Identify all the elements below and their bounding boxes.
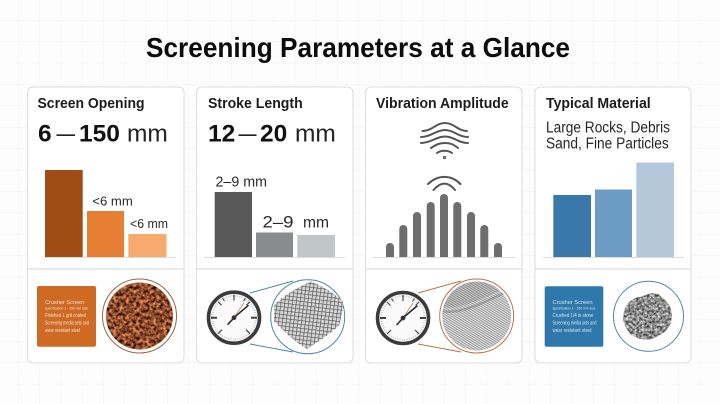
value: 12 to 20 mm: 12	[208, 120, 235, 148]
bar chart: typical material	[543, 162, 684, 258]
image: gray pellets	[614, 281, 684, 351]
bar chart: screen opening: <6 mm	[92, 193, 133, 208]
icon: zoom leader lines	[250, 281, 293, 352]
text: material list	[546, 120, 670, 152]
panel: screen opening	[28, 87, 184, 363]
info card: blue: Crusher Screen	[552, 300, 593, 306]
info card: blue: Crushed 1/4 in stone	[552, 313, 594, 319]
icon: gauge	[378, 292, 428, 344]
value: 12 to 20 mm: 20	[260, 120, 287, 148]
bar chart: vibration amplitude	[373, 194, 515, 258]
info card: orange: wear resistant steel	[45, 328, 80, 334]
icon: zoom leader lines	[418, 281, 461, 352]
image: woven mesh	[271, 280, 345, 354]
info card: blue: wear resistant steel	[552, 328, 592, 334]
image: brown rocks	[102, 279, 176, 353]
bar chart: stroke length	[204, 175, 345, 258]
image: fine mesh	[440, 278, 514, 353]
info card: orange: Crusher Screen	[45, 300, 84, 306]
value: 12 to 20 mm: mm	[295, 120, 336, 148]
text: material list: Sand, Fine Particles	[546, 135, 669, 152]
icon: arcs above bars	[428, 177, 460, 190]
info card: orange: Screening media sets and	[45, 320, 89, 326]
bar chart: stroke length: mm	[303, 214, 329, 231]
heading: vibration amplitude: Vibration Amplitude	[376, 96, 509, 112]
info card: orange	[37, 286, 96, 347]
heading: screen opening: Screen Opening	[38, 96, 144, 112]
info card: orange: Finished 1 grit coated	[45, 313, 86, 319]
value: 6 to 150 mm: 150	[79, 120, 120, 148]
bar chart: screen opening: <6 mm	[130, 217, 168, 231]
bar chart: stroke length: 2–9 mm	[216, 175, 267, 191]
title: Screening Parameters at a Glance	[146, 32, 570, 63]
value: 6 to 150 mm: —	[56, 120, 75, 148]
info card: blue	[545, 286, 603, 347]
bar chart: screen opening	[44, 170, 176, 258]
panel: stroke length	[196, 87, 353, 363]
panel: typical material	[535, 87, 691, 363]
icon: wave signal	[421, 123, 468, 158]
heading: typical material: Typical Material	[546, 96, 651, 112]
info card: blue: Screening media sets and	[552, 320, 597, 326]
info card: orange: specification 1 - 150 mm size	[45, 306, 88, 310]
icon: gauge	[208, 292, 260, 343]
info card: blue: specification 1 - 150 mm size	[552, 306, 596, 310]
bar chart: stroke length: 2–9	[262, 212, 294, 231]
value: 6 to 150 mm: mm	[127, 120, 168, 148]
heading: stroke length: Stroke Length	[208, 96, 303, 112]
text: material list: Large Rocks, Debris	[546, 120, 670, 137]
value: 12 to 20 mm: —	[238, 120, 257, 148]
value: 6 to 150 mm: 6	[38, 120, 52, 148]
panel: vibration amplitude	[366, 87, 522, 363]
